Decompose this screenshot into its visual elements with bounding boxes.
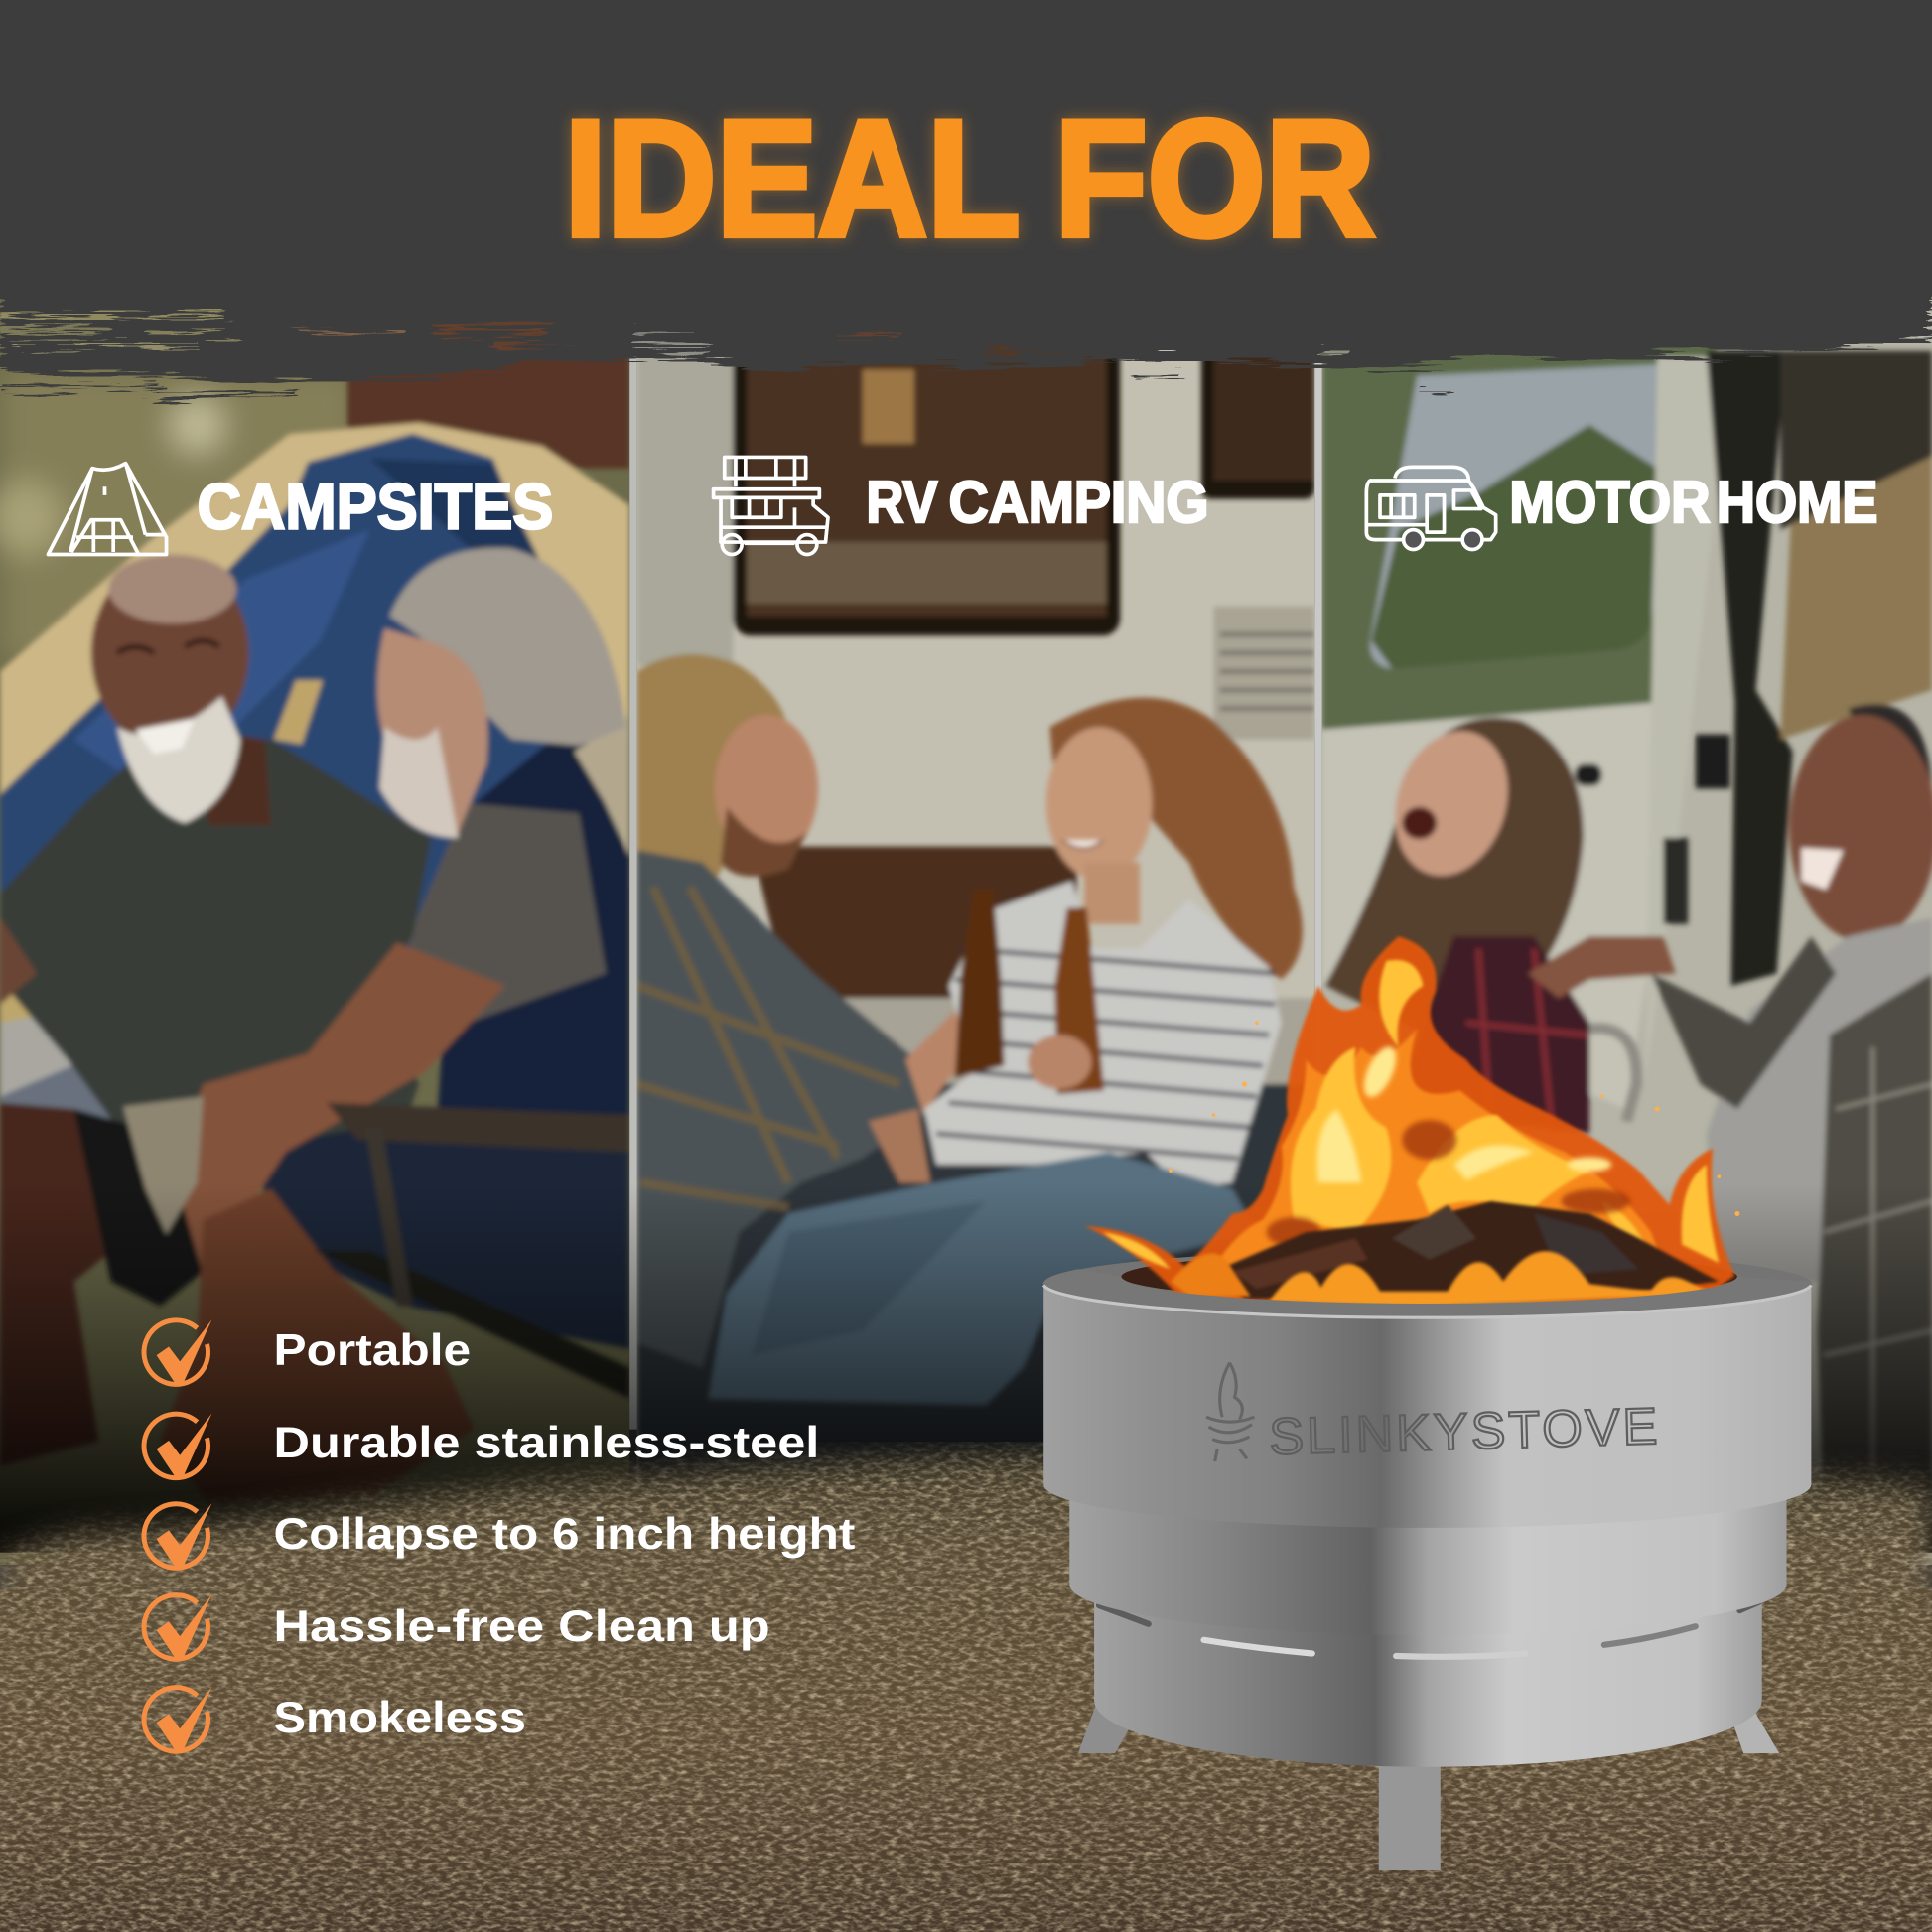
sparks	[1169, 1021, 1739, 1216]
product: fire pit	[1043, 1249, 1812, 1870]
feature: portable: Portable	[274, 1326, 471, 1375]
man one head	[207, 733, 272, 826]
heading: motor home	[1509, 469, 1877, 535]
icon: rv with roof rack	[714, 457, 828, 554]
flames bright tongues	[1103, 960, 1719, 1269]
legs and arms	[0, 1103, 136, 1466]
logs	[1213, 1201, 1719, 1299]
logo emblem	[1206, 1363, 1254, 1461]
man one tee	[0, 740, 431, 1152]
fire pit front rim and logo	[1043, 1269, 1811, 1466]
logo wordmark: SLINKYSTOVE	[1269, 1398, 1658, 1466]
upper section	[1043, 1284, 1811, 1528]
title: FOR	[1054, 86, 1375, 271]
icon: check 4	[144, 1594, 211, 1660]
dark gradient over photos	[0, 1182, 1932, 1553]
man two head	[377, 628, 487, 838]
flames hot core	[1317, 1042, 1611, 1182]
fire	[1084, 936, 1739, 1307]
fire bowl	[1121, 1252, 1737, 1302]
man two vest	[435, 741, 629, 1118]
panel: campsites photo	[0, 296, 629, 1565]
vent slots	[1099, 1601, 1759, 1657]
ground	[0, 1442, 1932, 1932]
woman hair	[1049, 698, 1303, 980]
panel: motor home photo	[1322, 296, 1932, 1565]
feature: durable: Durable stainless-steel	[274, 1419, 819, 1467]
heading: campsites: CAMPSITES	[198, 471, 553, 542]
title: IDEAL	[564, 86, 1021, 271]
icon: check 5	[144, 1687, 211, 1752]
middle section	[1069, 1466, 1787, 1635]
panel: rv camping photo	[637, 349, 1314, 1471]
man plaid shirt	[637, 850, 924, 1368]
heading: motor home: HOME	[1717, 469, 1877, 535]
icon: tent	[48, 464, 167, 554]
title	[564, 86, 1375, 271]
feature: smokeless: Smokeless	[274, 1694, 526, 1742]
lower section	[1094, 1589, 1762, 1767]
woman one	[1324, 718, 1584, 1047]
feature: collapse: Collapse to 6 inch height	[274, 1510, 855, 1559]
dark flame shadows	[1267, 1120, 1630, 1247]
front rim lip	[1043, 1269, 1811, 1316]
flames outer layer	[1084, 936, 1734, 1302]
flames over logs	[1269, 1251, 1713, 1307]
woman two	[1847, 701, 1932, 784]
rim	[1043, 1249, 1812, 1318]
woman striped shirt	[924, 881, 1282, 1189]
header background	[0, 0, 1932, 321]
torn brush edge of header	[0, 246, 1932, 397]
feature: clean up: Hassle-free Clean up	[274, 1602, 770, 1651]
feature list	[144, 1319, 855, 1752]
panel dividers	[629, 345, 1322, 1430]
icon: check 3	[144, 1503, 211, 1569]
jeans	[709, 1152, 1257, 1405]
legs	[1078, 1701, 1779, 1870]
icon: check 1	[144, 1319, 211, 1385]
bottles	[955, 890, 1004, 1078]
flames mid layer	[1201, 1029, 1664, 1294]
man hair and face	[637, 654, 789, 894]
icon: check 2	[144, 1414, 211, 1478]
heading: rv camping: CAMPING	[949, 469, 1208, 535]
icon: motor home	[1366, 467, 1496, 550]
heading: rv camping: RV	[866, 469, 938, 535]
heading: motor home: MOTOR	[1509, 469, 1711, 535]
